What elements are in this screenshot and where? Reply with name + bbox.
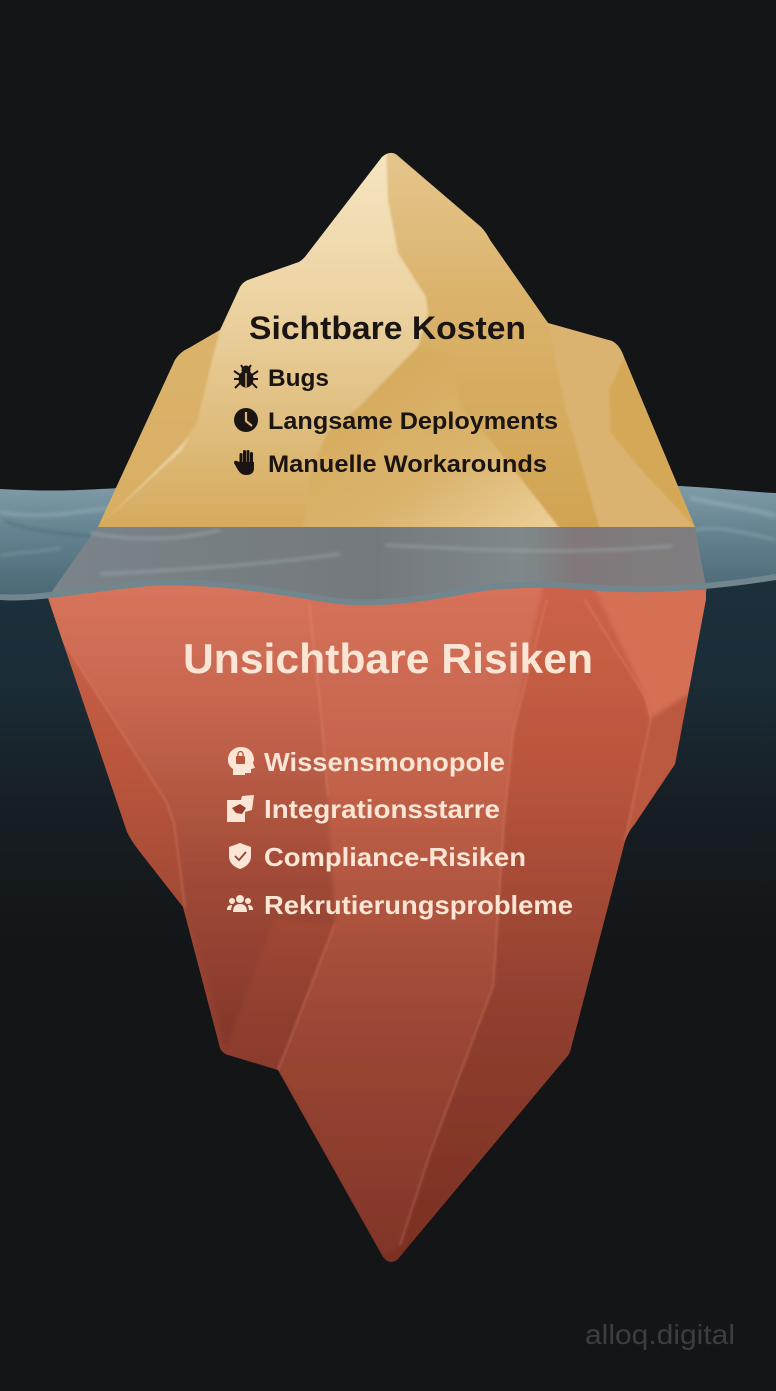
icon: people	[227, 895, 253, 912]
watermark: alloq.digital	[585, 1319, 735, 1350]
label: Compliance-Risiken: Compliance-Risiken	[264, 842, 526, 872]
label: Rekrutierungsprobleme: Rekrutierungsprobleme	[264, 890, 573, 920]
facet: lit peak	[98, 150, 428, 530]
facet: right flank	[386, 150, 700, 530]
crease lines	[53, 599, 651, 1245]
label: Bugs: Bugs	[268, 365, 329, 392]
label: Integrationsstarre: Integrationsstarre	[264, 794, 500, 824]
water highlights	[0, 498, 776, 556]
icon: puzzle	[227, 795, 254, 822]
icon: shield	[229, 843, 251, 869]
icon: hand	[234, 450, 254, 475]
list: invisible risks	[227, 747, 573, 920]
iceberg below water	[40, 565, 712, 1262]
water surface band	[0, 486, 776, 602]
icon: head with lock	[228, 747, 255, 775]
facet: light centre	[278, 565, 547, 1257]
list: visible costs	[234, 365, 558, 478]
icon: clock	[234, 408, 258, 432]
submerged water overlap	[0, 527, 776, 602]
heading: Sichtbare Kosten: Sichtbare Kosten	[249, 310, 526, 346]
iceberg above water	[90, 150, 720, 535]
waterline wave	[0, 577, 776, 602]
heading: Unsichtbare Risiken: Unsichtbare Risiken	[183, 635, 593, 682]
facet: light left	[40, 565, 335, 1048]
facet: right shoulder	[548, 323, 695, 530]
facet: left shoulder	[98, 328, 221, 527]
label: Langsame Deployments: Langsame Deployments	[268, 408, 558, 435]
deep water background	[0, 570, 776, 950]
label: Wissensmonopole: Wissensmonopole	[264, 747, 505, 777]
label: Manuelle Workarounds: Manuelle Workarounds	[268, 451, 547, 478]
icon: bug	[234, 365, 258, 388]
overlap highlights	[90, 530, 672, 574]
facet: right flank	[568, 836, 627, 1054]
facet: lower centre	[303, 347, 561, 530]
